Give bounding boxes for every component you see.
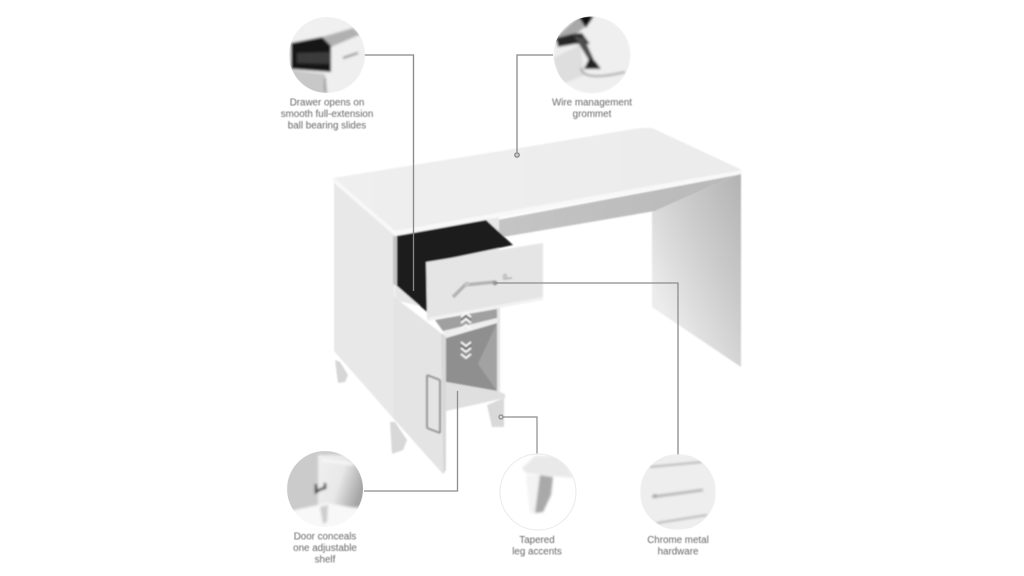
callout line: chrome hardware: [495, 283, 678, 455]
icon: grommet detail: [553, 16, 631, 94]
icon: tapered leg detail: [500, 454, 576, 530]
caption: drawer: Drawer opens on: [290, 98, 364, 108]
right front leg: [487, 398, 504, 427]
caption: grommet: Wire management: [552, 98, 632, 108]
cabinet column: [395, 216, 499, 325]
callout line: door: [364, 391, 458, 491]
desktop: [333, 128, 742, 231]
caption: grommet: grommet: [573, 109, 612, 120]
door: [393, 296, 443, 474]
upper shelf: [435, 309, 497, 334]
door handle: [427, 375, 440, 433]
caption: door: shelf: [315, 554, 336, 566]
icon: door detail: [287, 451, 363, 526]
front left leg: [390, 422, 407, 454]
caption: drawer: ball bearing slides: [288, 120, 366, 132]
caption: drawer: smooth full-extension: [281, 109, 373, 120]
caption: chrome hardware: Chrome metal: [647, 535, 709, 546]
cabinet floor: [446, 382, 505, 411]
right side panel: [652, 174, 741, 367]
drawer front: [426, 243, 543, 320]
column right edge: [497, 300, 500, 392]
drawer pull: [453, 282, 495, 297]
desk illustration: [333, 128, 742, 474]
caption: grommet: [552, 98, 632, 120]
motion arrows: [461, 313, 471, 329]
caption: chrome hardware: hardware: [658, 546, 699, 558]
infographic: desk with feature callouts: [280, 16, 742, 564]
caption: tapered leg: Tapered: [519, 535, 555, 546]
callout line: grommet: [515, 55, 553, 157]
caption: door: Door conceals: [294, 532, 356, 542]
callout line: tapered leg: [499, 415, 537, 455]
caption: drawer: [281, 98, 373, 132]
caption: door: [293, 532, 357, 566]
left end panel: [334, 180, 395, 418]
caption: tapered leg: [512, 535, 562, 558]
back left leg: [335, 360, 348, 383]
caption: door: one adjustable: [293, 543, 357, 554]
callout line: drawer: [364, 55, 414, 291]
caption: chrome hardware: [647, 535, 709, 558]
caption: tapered leg: leg accents: [512, 546, 562, 558]
drawer cavity: [396, 220, 513, 312]
icon: drawer detail: [288, 16, 366, 94]
cabinet interior: [446, 323, 497, 391]
modesty panel: [497, 175, 737, 238]
icon: chrome hardware detail: [640, 454, 716, 530]
